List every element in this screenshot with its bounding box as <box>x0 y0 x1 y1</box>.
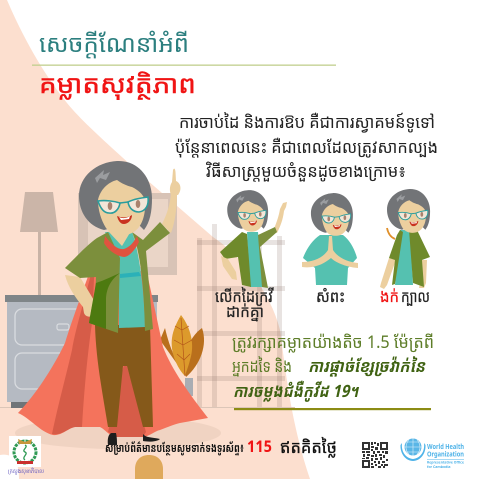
raised arm <box>162 193 177 233</box>
jacket left <box>65 232 120 333</box>
logo: WHO: Organization <box>427 450 464 460</box>
divider line <box>32 64 336 66</box>
arms and hands <box>302 236 358 268</box>
hand pointing <box>170 169 180 195</box>
distance message: ការផ្តាច់ខ្សែច្រវ៉ាក់នៃ <box>308 354 426 377</box>
jacket left <box>220 232 251 287</box>
plant <box>160 315 204 396</box>
label: nod <box>380 285 430 307</box>
nod arrow <box>387 228 395 239</box>
intro text <box>175 110 438 182</box>
intro text: វិធីសាស្ត្រមួយចំនួនដូចខាងក្រោម៖ <box>206 159 406 182</box>
logo: ministry of health <box>8 436 44 475</box>
figure: woman greeting <box>302 193 358 285</box>
white corner blob <box>0 455 19 479</box>
figure: main woman superhero <box>18 161 208 445</box>
lamp <box>20 192 58 296</box>
cabinet <box>5 295 158 408</box>
cape inner shade <box>52 257 95 434</box>
cape centre shade <box>108 360 146 437</box>
head <box>227 190 268 232</box>
jacket left <box>389 230 403 285</box>
title: teal: សេចក្តីណែនាំអំពី <box>39 27 189 60</box>
logo: WHO <box>400 438 464 470</box>
WHO laurel <box>400 443 426 461</box>
distance message: ត្រូវរក្សាគម្លាតយ៉ាងតិច 1.5 ម៉ែត្រពី <box>232 330 434 353</box>
distance message: អ្នកដទៃ និង <box>232 354 292 377</box>
label: nod: ងក់ <box>380 285 399 307</box>
shoes <box>108 433 160 445</box>
logo: WHO: World Health <box>427 442 464 452</box>
head <box>311 193 353 236</box>
jacket right and sleeve <box>132 222 170 331</box>
message underline <box>234 408 431 410</box>
shelf <box>197 224 285 407</box>
label: sampeah: សំពះ <box>316 285 345 307</box>
cape <box>18 257 208 437</box>
jacket dark panel <box>89 273 120 329</box>
hotline text: សម្រាប់ព័ត៌មានបន្ថែមសូមទាក់ទងទូរស័ព្ទ៖ <box>105 439 244 456</box>
hotline number: 115 <box>247 434 272 457</box>
arms <box>380 258 427 289</box>
jacket right <box>409 230 430 287</box>
label: nod: ក្បាល <box>401 285 430 307</box>
floor shadow <box>15 417 221 449</box>
shirt <box>105 232 145 328</box>
waving arm <box>273 202 287 233</box>
body <box>303 235 357 285</box>
scarf <box>104 236 139 257</box>
distance message: ការចម្លងជំងឺកូវីដ 19។ <box>233 379 360 402</box>
shirt <box>395 230 413 285</box>
label: wave: ដាក់គ្នា <box>226 300 264 322</box>
logo: WHO: Representative Office <box>427 460 464 466</box>
picture inner <box>88 199 168 267</box>
label: wave <box>215 285 274 322</box>
jacket right <box>258 227 277 288</box>
yellow arch <box>135 455 163 479</box>
free of charge: ឥតគិតថ្លៃ <box>280 435 337 458</box>
head <box>387 189 430 233</box>
neck <box>108 231 131 246</box>
distance message <box>232 330 434 402</box>
body <box>247 232 263 287</box>
floor line <box>0 407 295 408</box>
intro text: ការចាប់ដៃ និងការឱប គឺជាការស្វាគមន៍ទូទៅ <box>179 110 435 133</box>
logo: ministry of health: ក្រសួងសុខាភិបាល <box>8 467 44 475</box>
trousers <box>95 325 153 427</box>
left arm <box>65 275 96 317</box>
picture frame <box>78 193 177 275</box>
title: red: គម្លាតសុវត្ថិភាព <box>39 67 196 101</box>
background: peach shape <box>0 0 310 479</box>
head <box>79 161 152 235</box>
figure: woman waving <box>220 190 287 288</box>
room scene <box>0 192 295 408</box>
figure: woman nodding <box>380 189 430 289</box>
label: wave: លើកដៃក្រវី <box>215 285 274 307</box>
arm on hip <box>221 256 237 280</box>
logo: WHO: for Cambodia <box>427 465 451 470</box>
WHO globe <box>404 438 422 456</box>
QR code <box>362 442 388 468</box>
WHO globe lines <box>404 438 422 456</box>
intro text: ប៉ុន្តែនាពេលនេះ គឺជាពេលដែលត្រូវសាកល្បង <box>175 135 438 158</box>
shirt band <box>120 272 141 278</box>
